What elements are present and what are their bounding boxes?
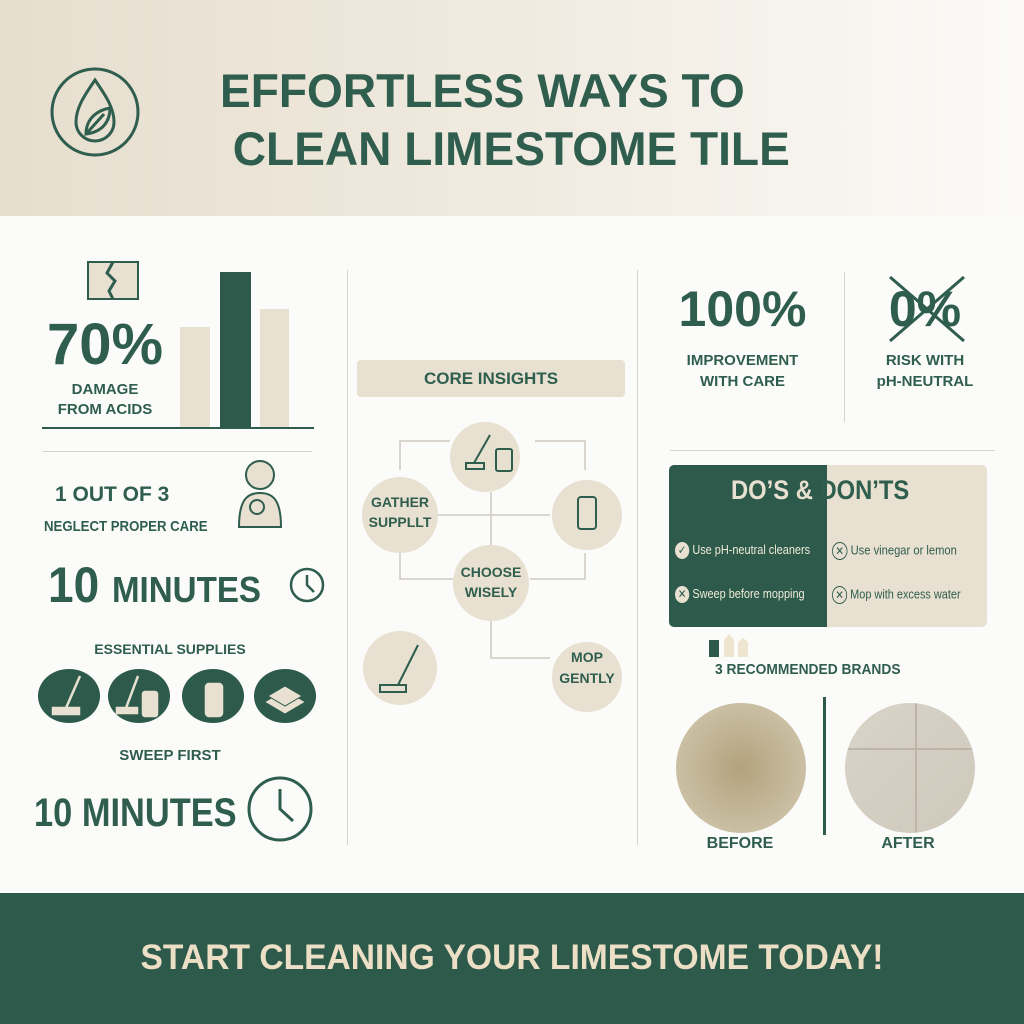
panel: dos and donts: ✕: [678, 587, 686, 601]
panel: core insights: WISELY: [465, 584, 517, 600]
stat 1 out of 3: 1 OUT OF 3: [55, 483, 169, 506]
icon: person: [238, 460, 282, 528]
panel: right stats: RISK WITH: [886, 352, 964, 369]
before image: [676, 703, 806, 833]
panel: left stats: NEGLECT PROPER CARE: [44, 518, 208, 535]
title: CLEAN LIMESTOME TILE: [233, 122, 790, 175]
do items: Use pH-neutral cleaners: [692, 542, 810, 557]
heading: core insights: [357, 360, 625, 397]
stat 0%: 0%: [889, 281, 961, 337]
icons: supplies: [38, 669, 316, 723]
text: AFTER: [881, 835, 935, 852]
dont items: Use vinegar or lemon: [851, 542, 957, 557]
panel: left stats: [34, 261, 324, 842]
panel: dos and donts: Sweep before mopping: [692, 586, 805, 601]
panel: left stats: DAMAGE: [72, 381, 138, 398]
icon: bottles: [709, 634, 748, 657]
panel: core insights: SUPPLLT: [369, 514, 431, 530]
footer call to action: START CLEANING YOUR LIMESTOME TODAY!: [140, 938, 883, 977]
stat 70%: 70%: [47, 312, 163, 377]
do items: ✓: [678, 543, 686, 557]
stat 10 minutes: 10 MINUTES: [48, 557, 261, 613]
stat 100%: 100%: [679, 281, 806, 337]
after image: [845, 703, 975, 833]
icon: leaf drop: [50, 68, 140, 156]
title: EFFORTLESS WAYS TO: [220, 64, 745, 117]
panel: right stats: pH-NEUTRAL: [877, 373, 973, 390]
heading: dos & donts: DO’S & DON’TS: [731, 475, 909, 505]
panel: dos and donts: ✕: [835, 588, 844, 602]
panel: core insights: GATHER: [371, 494, 429, 510]
heading: core insights: CORE INSIGHTS: [424, 369, 558, 388]
header band: [0, 0, 1024, 216]
stat 10 minutes bottom: 10 MINUTES: [34, 791, 237, 835]
panel: core insights: MOP: [571, 649, 603, 665]
heading: sweep first: SWEEP FIRST: [119, 747, 221, 764]
heading: essential supplies: ESSENTIAL SUPPLIES: [94, 641, 246, 657]
panel: right stats: WITH CARE: [700, 373, 785, 390]
dont items: ✕: [835, 544, 844, 558]
panel: right stats: IMPROVEMENT: [687, 352, 798, 369]
text: BEFORE: [707, 835, 773, 852]
panel: core insights: [357, 360, 625, 712]
title: [220, 64, 790, 175]
panel: dos and donts: [669, 465, 987, 627]
panel: left stats: FROM ACIDS: [58, 401, 152, 418]
column dividers: [347, 270, 348, 845]
panel: right stats: [670, 272, 995, 451]
icon: cracked tile: [87, 261, 139, 300]
flow diagram: [362, 422, 622, 712]
text: recommended brands: 3 RECOMMENDED BRANDS: [715, 661, 901, 678]
panel: dos and donts: Mop with excess water: [850, 586, 961, 601]
footer band: [0, 893, 1024, 1024]
panel: core insights: GENTLY: [559, 670, 615, 686]
panel: core insights: CHOOSE: [461, 564, 521, 580]
bar chart: [42, 272, 314, 429]
